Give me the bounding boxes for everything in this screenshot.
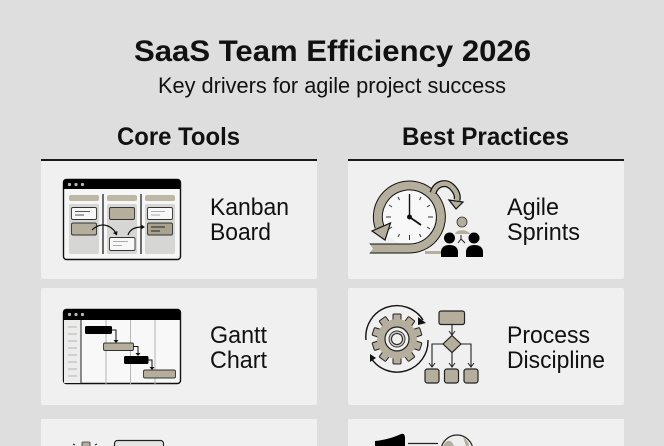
label: agile sprints: Agile	[507, 194, 559, 221]
panel: agile sprints	[348, 161, 624, 279]
label: process discipline: Discipline	[507, 347, 605, 374]
icon: kanban board	[63, 179, 180, 260]
label: gantt chart: Chart	[210, 347, 267, 374]
icon: process discipline	[366, 306, 478, 383]
label: kanban board: Board	[210, 219, 271, 246]
subtitle: Key drivers for agile project success	[158, 73, 506, 98]
title: SaaS Team Efficiency 2026	[134, 35, 531, 68]
icon: gantt chart	[63, 309, 180, 384]
label: process discipline: Process	[507, 322, 590, 349]
label: kanban board: Kanban	[210, 194, 289, 221]
label: gantt chart: Gantt	[210, 322, 267, 349]
icon: partial megaphone and globe	[375, 434, 473, 446]
panel: gantt chart	[41, 288, 317, 405]
column heading: core tools: Core Tools	[117, 123, 240, 151]
icon: agile sprints	[366, 184, 483, 257]
panel: partial bottom-right card	[348, 419, 624, 446]
panel: process discipline	[348, 288, 624, 405]
icon: partial tool	[73, 440, 164, 446]
panel: kanban board	[41, 161, 317, 279]
panel: partial bottom-left card	[41, 419, 317, 446]
label: agile sprints: Sprints	[507, 219, 580, 246]
column heading: best practices: Best Practices	[402, 123, 569, 151]
